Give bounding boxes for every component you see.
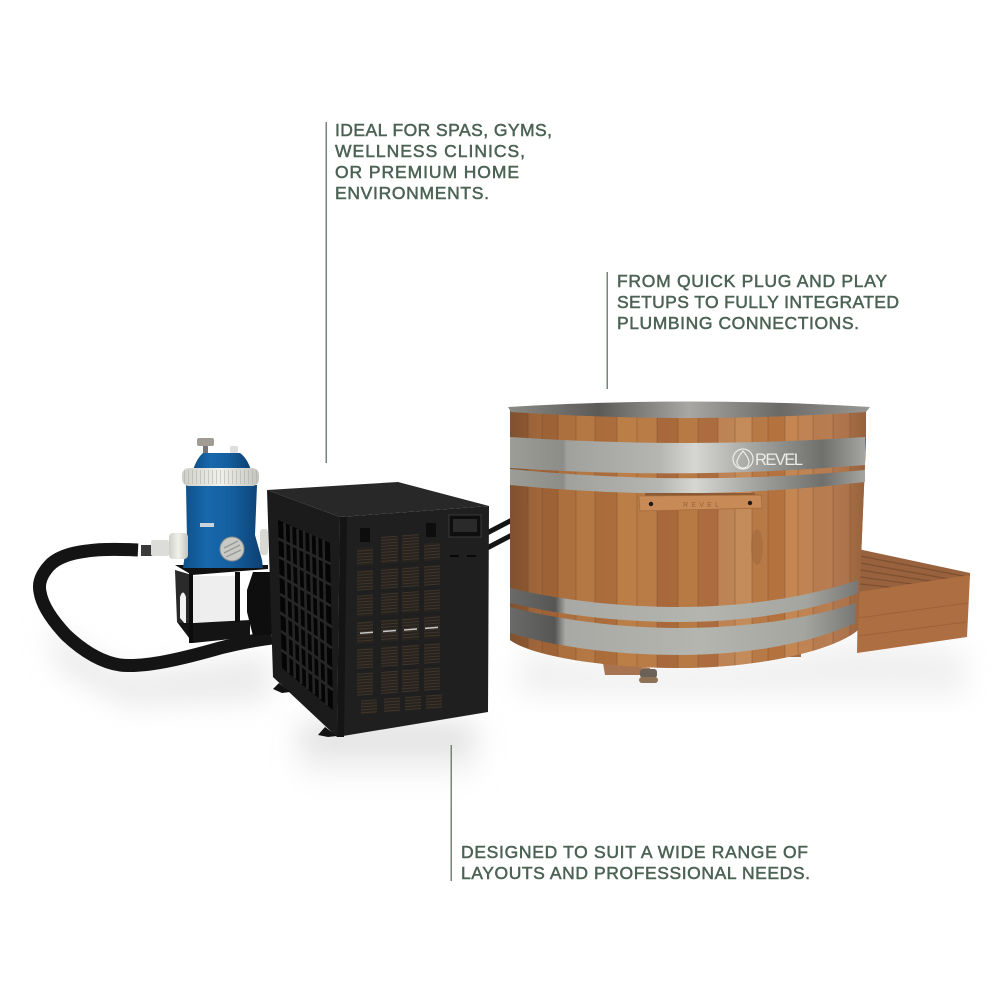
see-through stand shadow xyxy=(193,576,237,622)
cedar tub xyxy=(508,402,870,668)
callout: plug and play: PLUMBING CONNECTIONS. xyxy=(617,313,859,333)
callout: layouts: LAYOUTS AND PROFESSIONAL NEEDS. xyxy=(461,863,810,883)
callout: plug and play xyxy=(606,271,899,389)
blue filter xyxy=(141,438,268,568)
display panel xyxy=(449,515,481,557)
chiller top xyxy=(267,482,489,517)
stand bottom plate xyxy=(178,620,250,643)
callout: ideal for spas xyxy=(326,120,552,463)
filter dome xyxy=(193,453,251,470)
chiller feet xyxy=(273,683,337,737)
callout: plug and play: SETUPS TO FULLY INTEGRATED xyxy=(617,292,899,312)
right fitting xyxy=(260,529,268,555)
stand arch cutout xyxy=(180,592,186,625)
callout: ideal for spas: OR PREMIUM HOME xyxy=(335,162,519,182)
callout: ideal for spas: WELLNESS CLINICS, xyxy=(335,141,525,161)
wooden handle xyxy=(639,493,762,511)
pump motor xyxy=(247,572,272,636)
chiller vent clips xyxy=(360,523,436,542)
filter body xyxy=(183,485,263,568)
callout: ideal for spas: ENVIRONMENTS. xyxy=(335,183,489,203)
dial xyxy=(220,537,244,561)
filter label xyxy=(200,523,214,527)
left union fitting xyxy=(141,533,188,559)
callout: plug and play: FROM QUICK PLUG AND PLAY xyxy=(617,271,887,291)
chiller front face xyxy=(337,506,489,737)
steel band 4 xyxy=(510,603,856,655)
floor reflections xyxy=(45,625,965,790)
stand top plate xyxy=(175,565,268,575)
insulated hose xyxy=(39,549,272,666)
tub feet xyxy=(603,652,801,683)
chiller left face xyxy=(267,490,340,737)
tub rim xyxy=(508,402,870,418)
callout: layouts: DESIGNED TO SUIT A WIDE RANGE OF xyxy=(461,842,808,862)
chiller left grille xyxy=(278,520,333,710)
stand left panel xyxy=(175,570,193,643)
callout: layouts xyxy=(450,745,810,883)
chiller unit xyxy=(267,482,489,737)
top knobs xyxy=(197,438,238,454)
steel band 3 xyxy=(510,580,858,622)
brand logo: REVEL xyxy=(755,451,803,469)
chiller front grille xyxy=(357,532,442,715)
steel band 1 xyxy=(510,437,865,473)
steel band 2 xyxy=(510,469,865,493)
hoses behind tub xyxy=(487,520,512,548)
white collar xyxy=(182,468,259,486)
callout: ideal for spas: IDEAL FOR SPAS, GYMS, xyxy=(335,120,552,140)
tub staves xyxy=(510,410,866,668)
wooden step xyxy=(857,549,970,653)
brand logo xyxy=(733,449,803,469)
wooden handle: REVEL xyxy=(683,502,719,509)
filter stand and pump xyxy=(175,565,272,643)
